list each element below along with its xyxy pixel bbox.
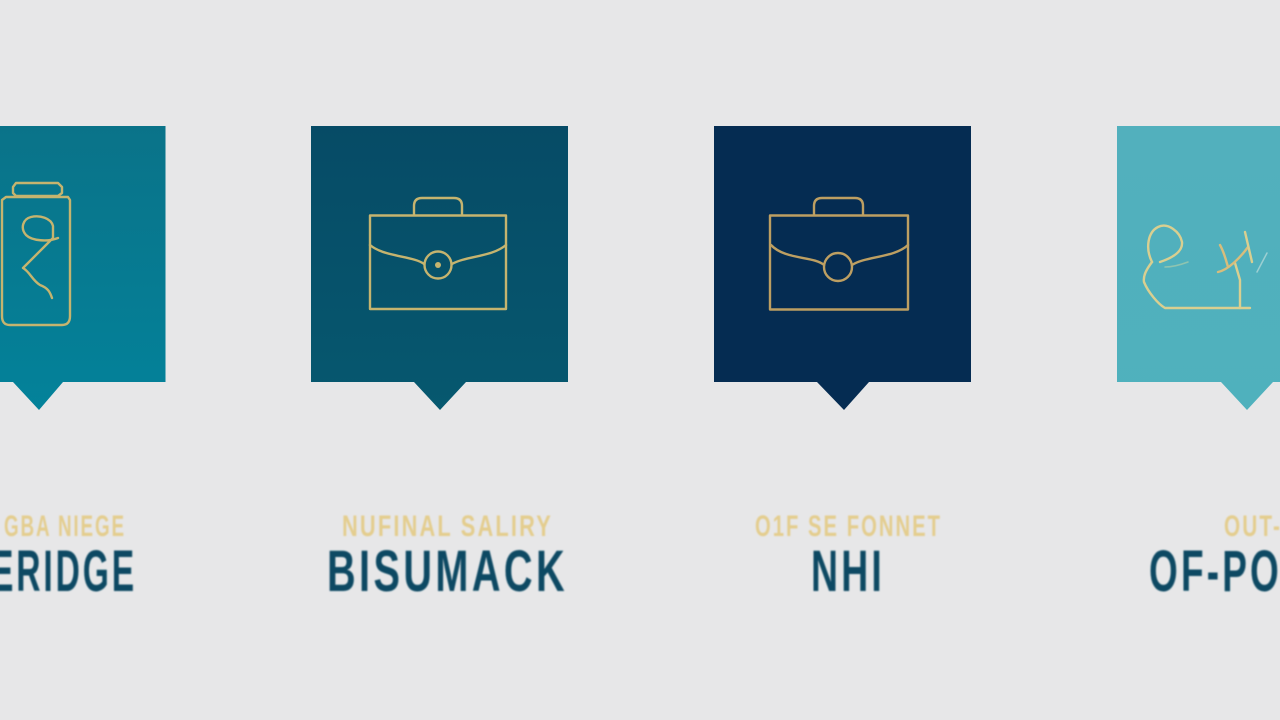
panel: navy card [714, 126, 971, 604]
sublabel: O1F SE FONNET [755, 510, 942, 543]
sublabel: GBA NIEGE [4, 510, 126, 543]
panel: left teal card [0, 126, 166, 604]
heading: BISUMACK [327, 539, 568, 604]
card shape [1117, 126, 1280, 410]
icon: bottle [2, 183, 70, 325]
sublabel: NUFINAL SALIRY [342, 510, 553, 543]
card shape [311, 126, 568, 410]
icon: hand-drawn figure [1144, 226, 1267, 308]
icon: briefcase [770, 198, 908, 310]
card shape [714, 126, 971, 410]
panel: light teal card [1117, 126, 1280, 604]
heading: NHI [811, 539, 885, 604]
icon: briefcase [370, 198, 506, 309]
panel: dark teal card [311, 126, 568, 604]
card shape [0, 126, 166, 410]
